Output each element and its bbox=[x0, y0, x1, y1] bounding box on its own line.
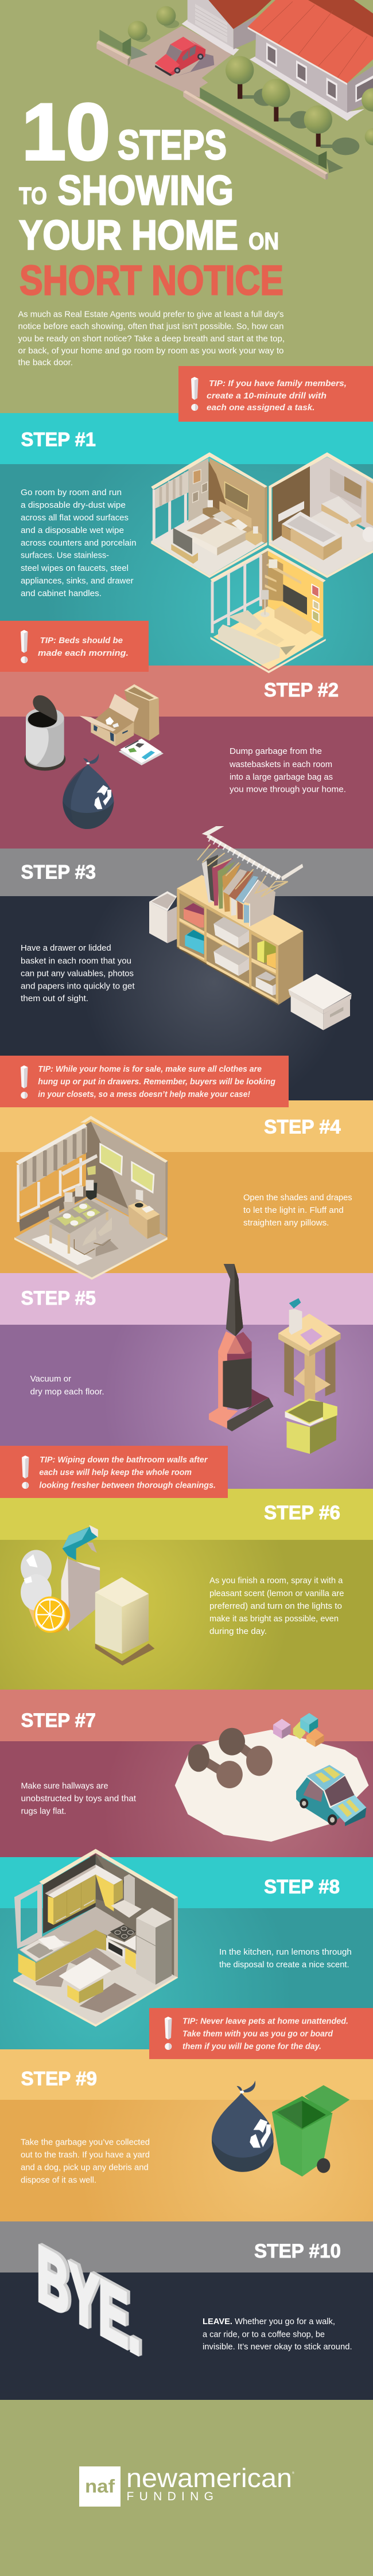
callout: tip clothes: TIP: While your home is for sale, make sure all clothes are bbox=[38, 1065, 262, 1074]
ice cream bbox=[21, 1550, 52, 1628]
cardboard box bbox=[79, 684, 159, 746]
text block: step 7: Make sure hallways are bbox=[21, 1782, 108, 1791]
hangers and rail bbox=[197, 826, 303, 897]
stool bbox=[278, 1298, 341, 1405]
logo: New American Funding: FUNDING bbox=[126, 2490, 213, 2503]
illustration: bedroom, bathroom and living room cutaways bbox=[151, 452, 373, 673]
lemon bbox=[34, 1597, 70, 1633]
garbage bag bbox=[63, 753, 114, 829]
callout: tip clothes: in your closets, so a mess doesn’t help make your case! bbox=[38, 1090, 250, 1099]
logo: New American Funding: ® bbox=[292, 2471, 294, 2475]
text block: step 6: pleasant scent (lemon or vanilla are bbox=[209, 1589, 344, 1598]
illustration: kitchen cutaway bbox=[13, 1849, 178, 2027]
text block: step 7 bbox=[21, 1782, 136, 1816]
heading: step 3: STEP #3 bbox=[21, 862, 96, 884]
panel: footer bbox=[0, 2400, 373, 2576]
text block: step 4: straighten any pillows. bbox=[243, 1219, 329, 1228]
panel: step 7 bbox=[0, 1690, 373, 1857]
panel: intro background bbox=[0, 0, 373, 413]
text block: step 8: In the kitchen, run lemons through bbox=[219, 1948, 352, 1957]
heading: step 10: STEP #10 bbox=[254, 2240, 341, 2262]
text block: step 1: and cabinet handles. bbox=[21, 589, 102, 598]
icon: exclamation bbox=[22, 1456, 29, 1489]
icon: exclamation bbox=[21, 1065, 28, 1099]
callout: tip pets: them if you will be gone for the day. bbox=[182, 2042, 321, 2052]
text block: step 6 bbox=[209, 1577, 344, 1636]
text block: step 10: a car ride, or to a coffee shop, be bbox=[203, 2330, 325, 2340]
icon: exclamation bbox=[21, 630, 28, 663]
hedges and low walls bbox=[96, 30, 343, 180]
text block: step 6: preferred) and turn on the lights to bbox=[209, 1602, 342, 1611]
illustration: isometric BYE lettering: BYE. bbox=[37, 2229, 141, 2372]
callout: tip clothes: hung up or put in drawers. Remember, buyers will be looking bbox=[38, 1077, 275, 1087]
title: TO bbox=[19, 182, 47, 209]
callout: tip family drill: TIP: If you have family members, bbox=[209, 379, 347, 388]
text block: step 3: basket in each room that you bbox=[21, 957, 131, 966]
intro text: As much as Real Estate Agents would prefer to give at least a full day’s bbox=[18, 310, 284, 320]
panel: step 4 bbox=[0, 1100, 373, 1273]
text block: step 3: can put any valuables, photos bbox=[21, 970, 134, 979]
panel: step 10 bbox=[0, 2221, 373, 2400]
text block: step 3 bbox=[21, 944, 135, 1003]
text block: step 6: As you finish a room, spray it with a bbox=[209, 1577, 343, 1586]
text block: step 10: LEAVE. Whether you go for a walk, bbox=[203, 2317, 335, 2326]
illustration: closet shelf, clothes and storage boxes bbox=[149, 826, 352, 1030]
callout: tip beds: made each morning. bbox=[38, 649, 129, 658]
shelf unit bbox=[177, 875, 303, 1006]
text block: step 6: make it as bright as possible, even bbox=[209, 1614, 339, 1624]
garage bbox=[182, 0, 271, 56]
title: YOUR HOME bbox=[19, 212, 238, 258]
toy blocks bbox=[273, 1713, 324, 1747]
icon: recycling bbox=[250, 2119, 271, 2148]
text block: step 1: across counters and porcelain bbox=[21, 539, 136, 548]
text block: step 9: Take the garbage you’ve collected bbox=[21, 2138, 150, 2147]
text block: step 3: them out of sight. bbox=[21, 994, 88, 1003]
callout: tip bathroom walls: looking fresher between thorough cleanings. bbox=[39, 1481, 216, 1490]
callout: tip bathroom walls: each use will help keep the whole room bbox=[39, 1468, 192, 1477]
text block: step 9: dispose of it as well. bbox=[21, 2176, 96, 2185]
illustration: dining room cutaway bbox=[14, 1116, 168, 1280]
heading: step 9: STEP #9 bbox=[21, 2068, 97, 2090]
bedroom bbox=[151, 452, 267, 578]
intro text: or back, of your home and go room by room as you work your way to bbox=[18, 347, 283, 356]
illustration: house, car and yard bbox=[96, 0, 373, 180]
text block: step 1: Go room by room and run bbox=[21, 488, 122, 497]
heading: step 2: STEP #2 bbox=[264, 679, 339, 701]
panel: step 1 bbox=[0, 413, 373, 666]
green bin bbox=[272, 2085, 349, 2177]
text block: step 2 bbox=[229, 747, 346, 795]
callout: tip family drill: each one assigned a task. bbox=[207, 403, 314, 413]
intro text bbox=[18, 310, 285, 368]
text block: step 1: across all flat wood surfaces bbox=[21, 513, 129, 523]
text block: step 2: wastebaskets in each room bbox=[229, 760, 332, 769]
callout: tip pets: Take them with you as you go or board bbox=[182, 2030, 333, 2039]
callout: tip pets bbox=[149, 2008, 373, 2059]
panel: step 5 bbox=[0, 1273, 373, 1489]
vacuum bbox=[209, 1264, 274, 1431]
dumbbells and toy car bbox=[188, 1728, 366, 1826]
illustration: trash can, box, papers and garbage bag bbox=[24, 684, 164, 829]
text block: step 7: rugs lay flat. bbox=[21, 1807, 67, 1816]
title: 10 bbox=[22, 87, 110, 177]
intro text: you be ready on short notice? Take a deep breath and start at the top, bbox=[18, 334, 285, 344]
papers bbox=[119, 738, 164, 765]
callout: tip beds bbox=[0, 621, 149, 672]
illustration: ice cream, spray bottle, lemon and lamp bbox=[21, 1525, 154, 1666]
text block: step 1: appliances, sinks, and drawer bbox=[21, 577, 134, 586]
text block: step 2: Dump garbage from the bbox=[230, 747, 322, 756]
heading: step 6: STEP #6 bbox=[264, 1502, 340, 1524]
text block: step 10 bbox=[203, 2317, 352, 2352]
callout: tip family drill: create a 10-minute drill with bbox=[207, 391, 327, 400]
callout: tip beds: TIP: Beds should be bbox=[40, 636, 123, 645]
clothes bbox=[202, 855, 275, 927]
main house bbox=[248, 0, 373, 121]
callout: tip bathroom walls: TIP: Wiping down the bathroom walls after bbox=[40, 1456, 208, 1465]
text block: step 8 bbox=[219, 1948, 352, 1970]
text block: step 8: the disposal to create a nice scent. bbox=[219, 1960, 349, 1970]
text block: step 5 bbox=[30, 1375, 104, 1397]
illustration: rug, dumbbells, toy blocks and toy car bbox=[175, 1713, 368, 1842]
text block: step 3: Have a drawer or lidded bbox=[21, 944, 111, 953]
text block: step 1: steel wipes on faucets, steel bbox=[21, 564, 129, 573]
text block: step 1: a disposable dry-dust wipe bbox=[21, 501, 126, 510]
text block: step 9: and a dog, pick up any debris and bbox=[21, 2163, 149, 2172]
text block: step 1: surfaces. Use stainless- bbox=[21, 551, 109, 560]
text block: step 6: during the day. bbox=[209, 1627, 267, 1636]
heading: step 7: STEP #7 bbox=[21, 1710, 96, 1731]
text block: step 4 bbox=[243, 1193, 352, 1228]
panel: step 2 bbox=[0, 666, 373, 849]
logo: New American Funding: naf bbox=[85, 2476, 115, 2497]
trees bbox=[226, 56, 373, 155]
text block: step 9: out to the trash. If you have a yard bbox=[21, 2150, 150, 2159]
text block: step 4: Open the shades and drapes bbox=[243, 1193, 352, 1203]
panel: step 6 bbox=[0, 1489, 373, 1690]
living room bbox=[211, 548, 326, 673]
intro text: notice before each showing, often that just isn’t possible. So, how can bbox=[18, 322, 283, 332]
heading: step 4: STEP #4 bbox=[264, 1116, 341, 1138]
text block: step 5: dry mop each floor. bbox=[30, 1388, 104, 1397]
logo: New American Funding bbox=[79, 2463, 294, 2507]
panel: step 3 bbox=[0, 849, 373, 1100]
text block: step 4: to let the light in. Fluff and bbox=[243, 1206, 344, 1215]
heading: step 1: STEP #1 bbox=[21, 429, 96, 451]
icon: exclamation bbox=[165, 2017, 172, 2050]
text block: step 1: and a disposable wet wipe bbox=[21, 526, 124, 535]
heading: step 5: STEP #5 bbox=[21, 1287, 96, 1309]
toy car bbox=[296, 1765, 366, 1826]
rug bbox=[175, 1730, 368, 1842]
driveway bbox=[128, 26, 232, 98]
title bbox=[19, 87, 283, 304]
garbage bag bbox=[212, 2080, 274, 2172]
icon: recycling bbox=[94, 785, 111, 810]
callout: tip pets: TIP: Never leave pets at home unattended. bbox=[182, 2017, 348, 2026]
trash can bbox=[24, 695, 65, 771]
text block: step 9 bbox=[21, 2138, 150, 2185]
title: ON bbox=[248, 227, 279, 255]
bushes bbox=[128, 6, 179, 42]
icon: exclamation bbox=[191, 377, 199, 411]
text block: step 2: you move through your home. bbox=[230, 785, 346, 795]
waste basket bbox=[149, 891, 177, 943]
text block: step 5: Vacuum or bbox=[30, 1375, 71, 1384]
illustration: garbage bag and green bin bbox=[212, 2080, 349, 2177]
text block: step 1 bbox=[21, 488, 136, 598]
title: SHORT NOTICE bbox=[20, 258, 283, 304]
car bbox=[155, 37, 214, 77]
title: STEPS bbox=[118, 123, 227, 169]
text block: step 7: unobstructed by toys and that bbox=[21, 1795, 136, 1804]
heading: step 8: STEP #8 bbox=[264, 1876, 340, 1898]
panel: step 8 bbox=[0, 1857, 373, 2049]
panel: step 9 bbox=[0, 2049, 373, 2221]
box lamp bbox=[95, 1577, 154, 1666]
intro text: the back door. bbox=[18, 359, 73, 368]
illustration: vacuum, stool and bucket bbox=[209, 1264, 341, 1454]
bucket bbox=[285, 1399, 337, 1454]
text block: step 2: into a large garbage bag as bbox=[230, 773, 333, 782]
title: SHOWING bbox=[57, 168, 234, 213]
text block: step 3: and papers into quickly to get bbox=[21, 982, 135, 991]
callout: tip family drill bbox=[178, 366, 373, 422]
callout: tip clothes bbox=[0, 1056, 289, 1107]
callout: tip bathroom walls bbox=[0, 1446, 228, 1498]
logo: New American Funding: newamerican bbox=[126, 2463, 292, 2493]
text block: step 10: invisible. It’s never okay to stick around. bbox=[203, 2342, 352, 2352]
bathroom bbox=[269, 452, 373, 578]
storage box bbox=[288, 974, 352, 1030]
spray bottle bbox=[61, 1525, 100, 1631]
